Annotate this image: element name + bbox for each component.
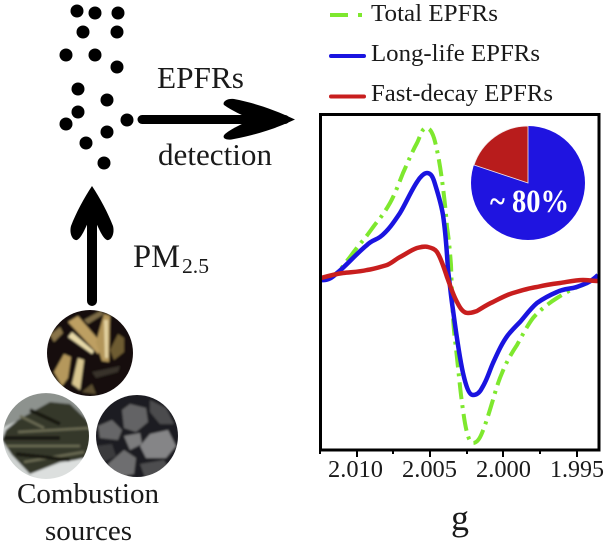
axis title: g: g (451, 498, 469, 538)
curve: total EPFRs (322, 128, 598, 443)
chart: EPR spectra (320, 114, 604, 538)
curve: fast-decay EPFRs (321, 247, 598, 313)
arrow: PM2.5 rising from sources (70, 186, 114, 301)
axis tick labels: 1.995 (550, 457, 604, 483)
legend item: Long-life EPFRs: Long-life EPFRs (371, 40, 540, 67)
label: Combustion sources: Combustion (17, 478, 159, 510)
label: Combustion sources (17, 478, 159, 543)
label: PM2.5: PM (133, 239, 180, 275)
axis ticks (320, 450, 577, 457)
axis tick labels: 2.005 (402, 457, 457, 483)
label: PM2.5: 2.5 (182, 254, 209, 278)
photo: dried kelp (2, 392, 92, 482)
plot frame (320, 114, 599, 450)
curve: long-life EPFRs (321, 173, 598, 395)
photo: wood chips (45, 308, 135, 398)
legend item: Fast-decay EPFRs: Fast-decay EPFRs (371, 80, 553, 107)
photo: coal (96, 395, 178, 477)
pie chart: ~80% long-life: ~ 80% (490, 184, 569, 220)
particle cloud (60, 4, 134, 170)
legend (330, 0, 553, 107)
arrow: EPFRs detection (142, 99, 295, 140)
legend item: Total EPFRs: Total EPFRs (371, 0, 498, 27)
label: PM2.5 (133, 239, 209, 278)
label: EPFRs: EPFRs (157, 60, 244, 95)
axis tick labels (328, 457, 604, 483)
axis tick labels: 2.000 (476, 457, 531, 483)
pie chart: ~80% long-life (471, 126, 585, 240)
label: detection: detection (158, 137, 272, 172)
axis tick labels: 2.010 (328, 457, 383, 483)
